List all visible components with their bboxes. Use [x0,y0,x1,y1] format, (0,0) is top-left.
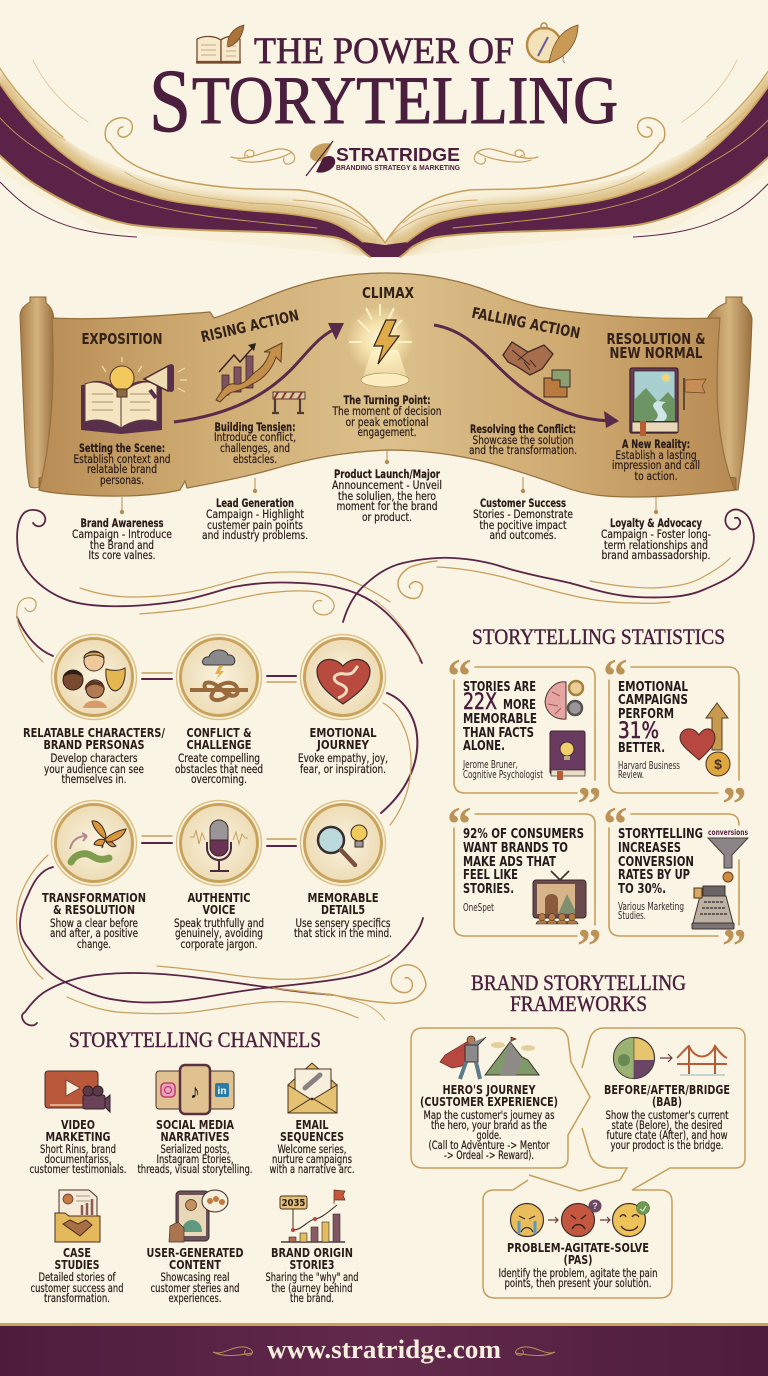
panel: stat conversion rates: “ [603,796,628,851]
stat text: BETTER. [618,741,665,756]
user generated text: CONTENT [169,1257,221,1272]
hero's journey text: HERO'S JOURNEY [442,1082,536,1097]
problem agitate solve text: PROBLEM-AGITATE-SOLVE [507,1240,649,1255]
stat text: Studies. [618,910,646,922]
before after bridge text: future ctate (After), and how [606,1128,728,1142]
icon: phones with social logos: ♪ [190,1081,200,1103]
icon: heart with path [300,634,386,720]
icon: scenic storybook and flag [630,368,706,436]
panel: email sequences [270,1063,354,1176]
text: lead generation campaign: custemer pain points [207,518,303,532]
label: Create compelling [178,751,260,765]
text: customer success stories: Stories - Demonstrate [473,507,573,521]
label: obstacles that need [175,762,263,776]
panel: stat conversion rates: ” [722,918,746,973]
text: product launch: moment for the brand [336,499,438,513]
stat text: CONVERSION [618,855,694,870]
stat text: STORIES. [463,882,514,897]
title: storytelling: TORYTELLING [192,62,618,138]
text: loyalty and advocacy campaign [601,516,711,562]
hero's journey text: (CUSTOMER EXPERIENCE) [420,1094,558,1109]
icon: open book with quill [196,25,244,63]
label: fear, or inspiration. [300,762,386,776]
panel: stat 22x [447,648,602,831]
label: Use sensery specifics [296,916,390,930]
user generated text: customer steries and [150,1281,240,1295]
stat text: Cognitive Psychologist [463,769,543,781]
text: brand awareness campaign: the Brand and [90,538,154,552]
label: change. [77,937,111,951]
case studies text: Detailed stories of [38,1270,116,1284]
stat text: 31% [618,719,659,744]
user generated text: experiences. [168,1291,222,1305]
scroll parchment band [39,273,735,497]
stat text: STORYTELLING [618,827,703,842]
icon: pocket watch and feather [527,23,578,63]
text: a new reality: impression and call [612,458,700,472]
before after bridge text: BEFORE/AFTER/BRIDGE [604,1082,730,1097]
before after bridge text: your prodoct is the bridge. [610,1138,724,1152]
icon: three emotion faces: ? [592,1201,598,1211]
text: lead generation campaign: Campaign - Highlight [206,507,304,521]
brand origin text: Sharing the "why" and [266,1270,358,1284]
stat text: EMOTIONAL [618,680,688,695]
stat text: INCREASES [618,841,681,856]
label [298,725,388,776]
icon: phone with person and chat [169,1190,228,1242]
panel: stat 22x: “ [447,648,472,703]
text: building tension: Building Tensien: [214,420,296,434]
user generated text: USER-GENERATED [146,1245,244,1260]
text: customer success stories: Customer Success [480,496,566,510]
text: resolving the conflict [469,422,577,457]
label: Develop characters [50,751,138,765]
email sequences text: EMAIL [296,1117,328,1132]
brand origin text [266,1245,358,1305]
heading: climax: CLIMAX [362,284,415,302]
panel: stat 31 percent [603,648,746,831]
before after bridge text: Show the customer's current [606,1108,728,1122]
panel: stat 31 percent: “ [603,648,628,703]
panel: narrative arc scroll [20,273,752,497]
panel: video marketing [30,1071,126,1176]
text: customer success stories [473,496,573,542]
heading: exposition: EXPOSITION [82,330,162,348]
panel: case studies [30,1190,124,1305]
label: your audience can see [44,762,144,776]
problem agitate solve text: (PAS) [564,1252,592,1267]
panel: problem agitate solve framework [483,1180,672,1298]
icon: funnel and cash register [692,828,748,929]
stat text [618,680,688,781]
label [175,725,263,786]
text: resolving the conflict: Showcase the solution [472,433,574,447]
stat text: Review. [618,769,644,781]
speech box [411,1028,590,1168]
icon: storm cloud and knot [176,634,262,720]
text: setting the scene: Setting the Scene: [79,441,165,455]
text: loyalty and advocacy campaign: Loyalty & Advocacy [610,516,702,530]
case studies text [30,1245,124,1305]
label: that stick in the mind. [294,926,392,940]
icon: video player and camera [45,1071,110,1112]
text: the turning point: The Turning Point: [344,393,430,407]
text: loyalty and advocacy campaign: Campaign - Foster long- [601,527,711,541]
email sequences text: with a narrative arc. [270,1162,354,1176]
icon: caped hero and mountain [440,1036,539,1079]
social media text: NARRATIVES [160,1129,230,1144]
text: building tension: ebstacles. [233,452,277,466]
panel: stat 22x: ” [577,776,602,831]
card border and quotes [609,814,739,936]
open book header illustration [0,60,768,258]
flourish left of logo [231,149,295,164]
stat text: TO 30%. [618,882,666,897]
heading: brand storytelling frameworks [471,970,686,1016]
panel: stat 92 percent [447,796,602,973]
social media text: Instagram Etories, [156,1152,234,1166]
icon: butterfly and caterpillar [52,800,136,886]
text: brand awareness campaign: Campaign - Introduce [72,527,172,541]
icon: heart, arrow and coin: $ [714,756,722,772]
connectors between element badges [142,673,296,846]
icon: rising chart [216,343,282,402]
icon: phones with social logos [156,1065,234,1114]
icon: faces and mask [52,634,136,720]
icon: heart, arrow and coin [680,703,730,776]
heading: rising action: RISING ACTION [199,306,301,346]
label: VOICE [202,902,236,917]
stat text: FEEL LIKE [463,868,518,883]
label: Evoke empathy, joy, [298,751,388,765]
label: EMOTIONAL [310,725,376,740]
brand origin text: STORIE3 [290,1257,334,1272]
panel: hero's journey framework [411,1028,590,1168]
icon: brain, gears and book [545,681,585,780]
case studies text: customer success and [30,1281,124,1295]
social media text [138,1117,252,1176]
panel: stat 92 percent: “ [447,796,472,851]
problem agitate solve text [498,1240,658,1290]
text: customer success stories: the pocitive impact [480,518,566,532]
user generated text [146,1245,244,1305]
panel: before after bridge framework [529,1028,745,1191]
stat text: MAKE ADS THAT [463,855,556,870]
label: JOURNEY [316,737,370,752]
brand origin text: the (aurney behind [272,1281,352,1295]
text: brand awareness campaign [72,516,172,562]
icon: barrier [272,392,305,413]
stat text: MORE [503,698,536,713]
email sequences text: SEQUENCES [280,1129,344,1144]
heading: resolution and new normal: RESOLUTION & [606,330,706,348]
hero's journey text: the hero, your brand as the [431,1118,547,1132]
panel: transformation and resolution [42,800,146,951]
panel: memorable details [294,800,392,940]
text: product launch: Product Launch/Major [334,467,441,481]
stat text: OneSpet [463,902,494,914]
heading: storytelling statistics: STORYTELLING STATISTICS [472,624,725,649]
icon: chart with date and flag: 2035 [282,1198,305,1209]
text: a new reality: A New Reality: [622,437,690,451]
stat text: Various Marketing [618,901,684,913]
text: building tension: Introduce conflict, [214,430,296,444]
icon: envelope with link [288,1063,337,1113]
text: lead generation campaign: Lead Generation [216,496,294,510]
label [42,890,146,951]
label: TRANSFORMATION [42,890,146,905]
label: DETAIL5 [321,902,365,917]
stat text: Harvard Business [618,760,680,772]
logo: stratridge [306,141,461,176]
email sequences text: Welcome series, [278,1142,346,1156]
case studies text: transformation. [44,1291,110,1305]
card border and quotes [609,667,739,793]
flourish right of logo [474,149,538,164]
stat text: 92% OF CONSUMERS [463,827,584,842]
title: storytelling: S [149,52,191,151]
card border and quotes [454,814,595,936]
text: the turning point [332,393,442,439]
text: setting the scene [74,441,170,487]
label: & RESOLUTION [53,902,135,917]
icon: puzzle [544,370,570,397]
label: Speak truthfully and [174,916,264,930]
case studies text: CASE [63,1245,91,1260]
panel: stat conversion rates [603,796,748,973]
label: and after, a positive [50,926,138,940]
label [174,890,264,951]
text: brand awareness campaign: Brand Awareness [80,516,164,530]
video marketing text: MARKETING [46,1129,110,1144]
label: CHALLENGE [186,737,252,752]
brand origin text: the brand. [290,1291,334,1305]
text: a new reality [612,437,700,483]
text: product launch: the solulien, the hero [338,489,436,503]
label: genuinely, avoiding [175,926,263,940]
label: BRAND PERSONAS [44,737,144,752]
stat text: 22X [463,690,497,715]
text: setting the scene: personas. [100,473,144,487]
speech box [483,1180,672,1298]
text: building tension [214,420,296,466]
icon: phones with social logos: in [218,1086,226,1097]
text: the turning point: The moment of decision [332,404,442,418]
before after bridge text: (BAB) [652,1094,682,1109]
hero's journey text: -> Ordeal -> Reward). [444,1148,534,1162]
user generated text: Showcasing real [160,1270,230,1284]
icon: handshake [503,342,553,375]
heading: falling action: FALLING ACTION [470,304,582,342]
icon: microphone [176,800,262,886]
social media text: SOCIAL MEDIA [156,1117,234,1132]
text: product launch: or product. [362,510,412,524]
heading: resolution and new normal: NEW NORMAL [610,344,703,362]
video marketing text: documentariss, [44,1152,112,1166]
footer website url: www.stratridge.com [267,1335,501,1364]
icon: book, bulb and megaphone [81,357,187,434]
problem agitate solve text: points, then present your solution. [504,1276,652,1290]
hero's journey text: (Call to Adventure -> Mentor [428,1138,550,1152]
stat text [462,680,543,781]
problem agitate solve text: Identify the problem, agitate the pain [498,1266,658,1280]
logo: stratridge: BRANDING STRATEGY & MARKETING [336,165,461,172]
text: building tension: challenges, and [220,441,290,455]
text: loyalty and advocacy campaign: term relationships and [604,538,708,552]
heading: brand storytelling frameworks: BRAND STORYTELLING [471,970,686,995]
text: the turning point: engagement. [358,425,416,439]
label: corporate jargon. [180,937,258,951]
label: RELATABLE CHARACTERS/ [23,725,166,740]
before after bridge text [604,1082,730,1152]
panel: emotional journey [298,634,388,776]
footer band [0,1323,768,1376]
text: product launch [332,467,442,524]
video marketing text: Short Rinıs, brand [40,1142,116,1156]
before after bridge text: state (Belore), the desired [612,1118,722,1132]
icon: funnel and cash register: conversions [708,828,748,837]
text: product launch: Announcement - Unveil [332,478,442,492]
panel: social media narratives [138,1065,252,1176]
video marketing text: VIDEO [61,1117,95,1132]
text: setting the scene: relatable brand [87,462,157,476]
label: AUTHENTIC [188,890,250,905]
hero's journey text: Map the customer's journey as [424,1108,554,1122]
decorative swirls [17,509,754,1025]
label: Show a clear before [50,916,138,930]
label: overcoming. [191,772,247,786]
hero's journey text [420,1082,558,1162]
stat text: ALONE. [463,739,505,754]
panel: stat 92 percent: ” [577,918,602,973]
text: customer success stories: and outcomes. [490,528,556,542]
card border and quotes [454,667,595,793]
speech box [529,1028,745,1191]
title: storytelling [149,52,618,151]
stat text: Jerome Bruner, [462,759,518,771]
heading: storytelling channels: STORYTELLING CHANNELS [69,1027,321,1052]
stat text: PERFORM [618,707,674,722]
text: a new reality: Establish a lasting [616,448,696,462]
stat text: STORIES ARE [463,680,536,695]
icon: magnifier and bulb [300,800,386,886]
stat text: RATES BY UP [618,868,690,883]
text: lead generation campaign: and industry problems. [202,528,308,542]
icon: folder with handshake [55,1190,100,1242]
stat text [618,827,703,922]
text: setting the scene: Establish context and [74,452,170,466]
heading: resolution and new normal [606,330,706,362]
stat text: THAN FACTS [463,726,534,741]
email sequences text: nurture campaigns [272,1152,352,1166]
stat text: WANT BRANDS TO [463,841,568,856]
icon: tv and audience [533,871,586,924]
text: resolving the conflict: Resolving the Conflict: [470,422,576,436]
text: brand awareness campaign: Its core valnes. [88,548,156,562]
label: themselves in. [62,772,126,786]
stat text [463,827,584,914]
panel: conflict and challenge [175,634,263,786]
label: CONFLICT & [186,725,252,740]
stat text: CAMPAIGNS [618,693,688,708]
icon: spotlight lightning bolt [346,304,414,387]
icon: before after circle and bridge [614,1038,727,1078]
title: the power of: THE POWER OF [254,31,514,72]
connectors from scroll to campaigns [120,450,658,514]
email sequences text [270,1117,354,1176]
text: a new reality: to action. [634,469,678,483]
video marketing text: customer testimonials. [30,1162,126,1176]
label: MEMORABLE [308,890,378,905]
scroll left roll [20,297,64,491]
label [23,725,166,786]
panel: brand origin stories [266,1190,358,1305]
panel: user-generated content [146,1190,244,1305]
stat text: MEMORABLE [463,712,537,727]
arrow: rising action [174,323,344,422]
icon: three emotion faces [510,1200,650,1236]
video marketing text [30,1117,126,1176]
heading: brand storytelling frameworks: FRAMEWORKS [510,991,647,1016]
hero's journey text: golde. [476,1128,502,1142]
case studies text: STUDIES [54,1257,100,1272]
text: the turning point: or peak emotional [346,415,428,429]
text: lead generation campaign [202,496,308,542]
brand origin text: BRAND ORIGIN [271,1245,353,1260]
social media text: threads, visual storytelling. [138,1162,252,1176]
panel: relatable characters [23,634,166,786]
panel: authentic voice [174,800,264,951]
text: resolving the conflict: and the transformation. [469,443,577,457]
logo: stratridge: STRATRIDGE [336,145,460,165]
scroll right roll [706,297,752,491]
arrow: falling action [434,325,619,428]
panel: stat 31 percent: ” [722,776,746,831]
label [294,890,392,940]
text: loyalty and advocacy campaign: brand ambassadorship. [602,548,710,562]
social media text: Serialized posts, [160,1142,230,1156]
